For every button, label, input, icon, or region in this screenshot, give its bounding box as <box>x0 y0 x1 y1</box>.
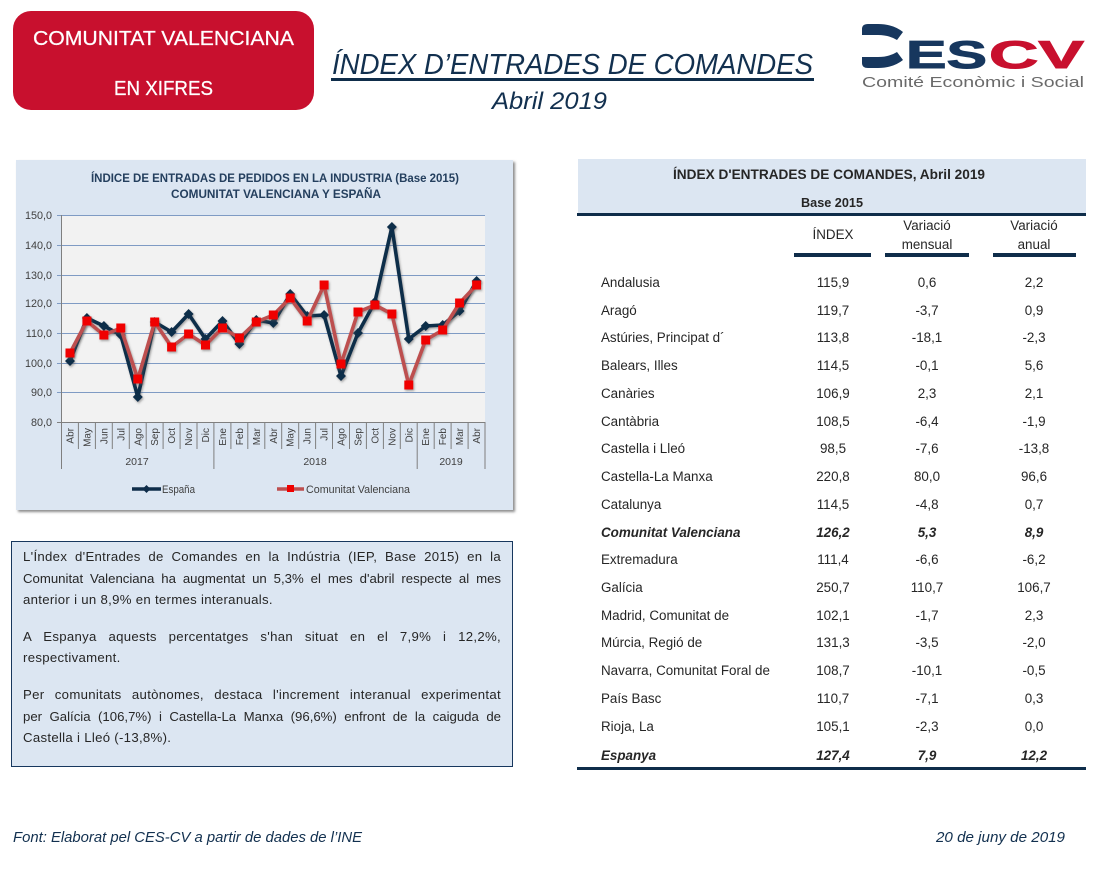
month labels: Oct <box>370 428 381 444</box>
month labels: Jul <box>320 428 331 441</box>
row names: Extremadura <box>601 552 678 567</box>
month labels: Jun <box>99 428 110 444</box>
text box: commentary: Comunitat Valenciana ha augmentat un 5,3% el mes d'abril respecte al mes <box>23 571 501 586</box>
legend <box>132 484 411 496</box>
month labels: Dic <box>201 428 212 442</box>
y axis labels: 150,0 <box>25 210 52 222</box>
badge: Comunitat Valenciana en xifres: EN XIFRES <box>114 77 213 100</box>
y axis labels <box>25 210 52 429</box>
column: monthly variation: 7,9 <box>918 748 937 763</box>
plot area <box>62 215 485 422</box>
month labels: Ene <box>218 428 229 446</box>
column: annual variation: 2,2 <box>1025 275 1043 290</box>
column headers: mensual <box>902 237 952 252</box>
month labels: Abr <box>269 427 280 444</box>
month labels: Ago <box>133 428 144 446</box>
title: Abril 2019 <box>490 88 607 115</box>
year labels: 2019 <box>439 456 463 468</box>
text box: commentary <box>11 541 513 767</box>
y axis labels: 110,0 <box>26 328 52 340</box>
column: monthly variation: 0,6 <box>918 275 936 290</box>
column: annual variation: 2,3 <box>1025 608 1043 623</box>
month labels: Nov <box>184 428 195 446</box>
column: index: 127,4 <box>816 748 850 763</box>
row names: Navarra, Comunitat Foral de <box>601 663 770 678</box>
column: annual variation: 106,7 <box>1017 580 1051 595</box>
column: annual variation: -2,3 <box>1022 330 1046 345</box>
table header band: ÍNDEX D'ENTRADES DE COMANDES, Abril 2019 <box>673 166 985 182</box>
column: index: 102,1 <box>816 608 850 623</box>
column: index: 115,9 <box>817 275 849 290</box>
month labels: Jul <box>116 428 127 441</box>
column: index <box>816 275 850 763</box>
month labels: Nov <box>387 428 398 446</box>
column: monthly variation <box>911 275 943 763</box>
panel: line chart <box>16 160 513 510</box>
column: monthly variation: -3,7 <box>915 303 939 318</box>
month labels: Sep <box>150 428 161 446</box>
column: index: 108,5 <box>816 414 850 429</box>
grid lines <box>57 216 485 392</box>
y axis labels: 130,0 <box>25 270 52 282</box>
column: index: 110,7 <box>817 691 849 706</box>
title: ÍNDEX D’ENTRADES DE COMANDES <box>332 48 814 81</box>
column: index: 108,7 <box>816 663 850 678</box>
month labels: Ene <box>421 428 432 446</box>
column: index: 250,7 <box>816 580 850 595</box>
row names: Canàries <box>601 386 655 401</box>
column: monthly variation: -10,1 <box>912 663 942 678</box>
month labels: Mar <box>455 427 466 445</box>
column: monthly variation: -4,8 <box>915 497 939 512</box>
column: monthly variation: -18,1 <box>912 330 942 345</box>
text box: commentary: Castella i Lleó (-13,8%). <box>23 730 171 745</box>
row names: Aragó <box>601 303 637 318</box>
logo: CES-CV <box>862 24 1084 91</box>
column: annual variation: -0,5 <box>1022 663 1046 678</box>
month labels: Feb <box>438 428 449 445</box>
legend: España <box>162 484 196 496</box>
column: monthly variation: -1,7 <box>915 608 939 623</box>
column: annual variation: 5,6 <box>1025 358 1043 373</box>
column: monthly variation: 80,0 <box>914 469 940 484</box>
table header band: Base 2015 <box>801 196 863 210</box>
column: index: 131,3 <box>816 635 850 650</box>
y axis labels: 120,0 <box>25 298 52 310</box>
row names: Cantàbria <box>601 414 660 429</box>
series: Comunitat Valenciana <box>66 281 481 389</box>
text box: commentary: anterior i un 8,9% en termes interanuals. <box>23 592 273 607</box>
row names: Astúries, Principat d´ <box>601 330 725 345</box>
column: monthly variation: -6,4 <box>915 414 939 429</box>
column: index: 105,1 <box>816 719 850 734</box>
column: index: 119,7 <box>817 303 849 318</box>
month labels: Abr <box>472 427 483 444</box>
row names: País Basc <box>601 691 662 706</box>
column: monthly variation: 2,3 <box>918 386 936 401</box>
row names: Catalunya <box>601 497 662 512</box>
logo: CES-CV: Comité Econòmic i Social <box>862 74 1084 91</box>
logo: CES-CV: CV <box>989 34 1084 77</box>
column: monthly variation: 110,7 <box>911 580 943 595</box>
badge: Comunitat Valenciana en xifres <box>13 11 314 110</box>
column: annual variation: 0,9 <box>1025 303 1043 318</box>
column: annual variation: -6,2 <box>1022 552 1046 567</box>
column: index: 114,5 <box>817 497 849 512</box>
row names: Madrid, Comunitat de <box>601 608 729 623</box>
column: annual variation: 2,1 <box>1025 386 1043 401</box>
column: annual variation: -2,0 <box>1022 635 1046 650</box>
text box: commentary: per Galícia (106,7%) i Castella-La Manxa (96,6%) enfront de la caiguda de <box>23 709 501 724</box>
column: annual variation: 96,6 <box>1021 469 1047 484</box>
row names: Galícia <box>601 580 643 595</box>
column: annual variation: 0,7 <box>1025 497 1043 512</box>
column: monthly variation: -0,1 <box>915 358 939 373</box>
column: index: 106,9 <box>816 386 850 401</box>
column: monthly variation: -2,3 <box>915 719 939 734</box>
y axis labels: 140,0 <box>25 240 52 252</box>
title <box>331 48 814 115</box>
column: monthly variation: 5,3 <box>918 525 937 540</box>
row names: Castella i Lleó <box>601 441 685 456</box>
column: index: 113,8 <box>817 330 849 345</box>
year labels <box>125 456 463 468</box>
column: monthly variation: -3,5 <box>915 635 939 650</box>
column headers: ÍNDEX <box>813 227 854 242</box>
column: annual variation: -13,8 <box>1019 441 1049 456</box>
row names: Rioja, La <box>601 719 654 734</box>
month labels: Oct <box>167 428 178 444</box>
month labels: Mar <box>252 427 263 445</box>
column headers: Variació <box>1010 218 1058 233</box>
month labels <box>66 427 483 447</box>
badge: Comunitat Valenciana en xifres: COMUNITAT VALENCIANA <box>33 27 294 50</box>
chart title: COMUNITAT VALENCIANA Y ESPAÑA <box>171 188 381 201</box>
month labels: Dic <box>404 428 415 442</box>
column: index: 126,2 <box>816 525 850 540</box>
column: index: 114,5 <box>817 358 849 373</box>
y axis labels: 80,0 <box>31 417 52 429</box>
row names: Comunitat Valenciana <box>601 525 741 540</box>
text box: commentary: respectivament. <box>23 650 121 665</box>
month labels: May <box>82 428 93 447</box>
column headers <box>794 218 1076 257</box>
logo: CES-CV: ES <box>906 34 987 77</box>
row names: Espanya <box>601 748 657 763</box>
legend: Comunitat Valenciana <box>306 484 411 496</box>
column: monthly variation: -7,1 <box>915 691 939 706</box>
chart title <box>91 172 459 201</box>
year labels: 2017 <box>125 456 149 468</box>
table header band <box>577 159 1086 216</box>
series: España <box>65 222 482 402</box>
month labels: Feb <box>235 428 246 445</box>
column: annual variation: 0,3 <box>1025 691 1043 706</box>
column: annual variation: 12,2 <box>1021 748 1048 763</box>
chart title: ÍNDICE DE ENTRADAS DE PEDIDOS EN LA INDUSTRIA (Base 2015) <box>91 172 459 185</box>
column: annual variation: 0,0 <box>1025 719 1043 734</box>
row names: Múrcia, Regió de <box>601 635 702 650</box>
column headers: anual <box>1018 237 1050 252</box>
month labels: Jun <box>303 428 314 444</box>
month labels: Sep <box>354 428 364 446</box>
source note: Font: Elaborat pel CES-CV a partir de dades de l’INE <box>13 829 363 846</box>
column: annual variation: 8,9 <box>1025 525 1044 540</box>
column headers: Variació <box>903 218 951 233</box>
column: annual variation: -1,9 <box>1022 414 1046 429</box>
row names <box>601 275 770 763</box>
row names: Andalusia <box>601 275 660 290</box>
column: index: 220,8 <box>816 469 850 484</box>
text box: commentary: A Espanya aquests percentatges s'han situat en el 7,9% i 12,2%, <box>23 629 501 644</box>
column: monthly variation: -7,6 <box>915 441 939 456</box>
y axis labels: 100,0 <box>25 358 52 370</box>
column: monthly variation: -6,6 <box>915 552 939 567</box>
row names: Castella-La Manxa <box>601 469 713 484</box>
panel: data table <box>577 159 1086 770</box>
date: 20 de juny de 2019 <box>935 829 1066 846</box>
month labels: May <box>286 428 297 447</box>
year labels: 2018 <box>303 456 327 468</box>
column: index: 111,4 <box>817 552 849 567</box>
column: index: 98,5 <box>820 441 846 456</box>
text box: commentary: L'Índex d'Entrades de Comandes en la Indústria (IEP, Base 2015) en la <box>23 549 501 564</box>
y axis labels: 90,0 <box>31 387 52 399</box>
column: annual variation <box>1017 275 1051 763</box>
month labels: Abr <box>66 427 76 444</box>
row names: Balears, Illes <box>601 358 678 373</box>
text box: commentary: Per comunitats autònomes, destaca l'increment interanual experimentat <box>23 687 501 702</box>
month labels: Ago <box>336 428 348 446</box>
